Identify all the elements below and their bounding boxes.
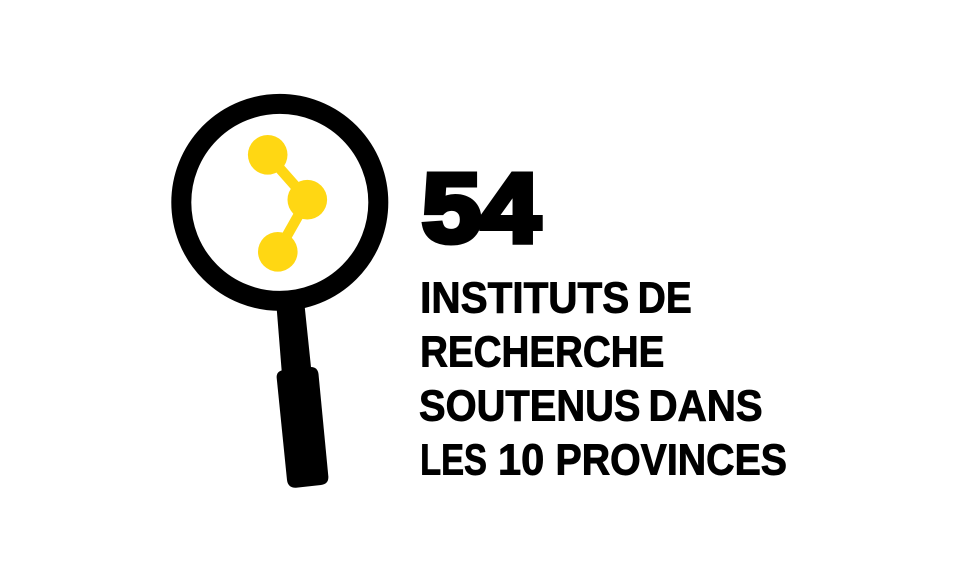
description text: INSTITUTS	[420, 274, 629, 323]
description text: RECHERCHE	[420, 328, 664, 377]
magnifier lens ring	[181, 104, 378, 301]
description text	[419, 274, 787, 484]
description text: SOUTENUS	[419, 381, 640, 430]
description text: LES	[420, 435, 487, 484]
big number: 54	[422, 153, 540, 262]
magnifier handle neck	[276, 300, 312, 375]
description text: PROVINCES	[556, 435, 787, 484]
molecule	[248, 135, 327, 272]
description text: 10	[498, 435, 544, 484]
icon: magnifying glass with molecule	[181, 104, 378, 488]
description text: DE	[638, 274, 692, 323]
description text: DANS	[648, 381, 763, 430]
magnifier handle grip	[277, 367, 328, 488]
